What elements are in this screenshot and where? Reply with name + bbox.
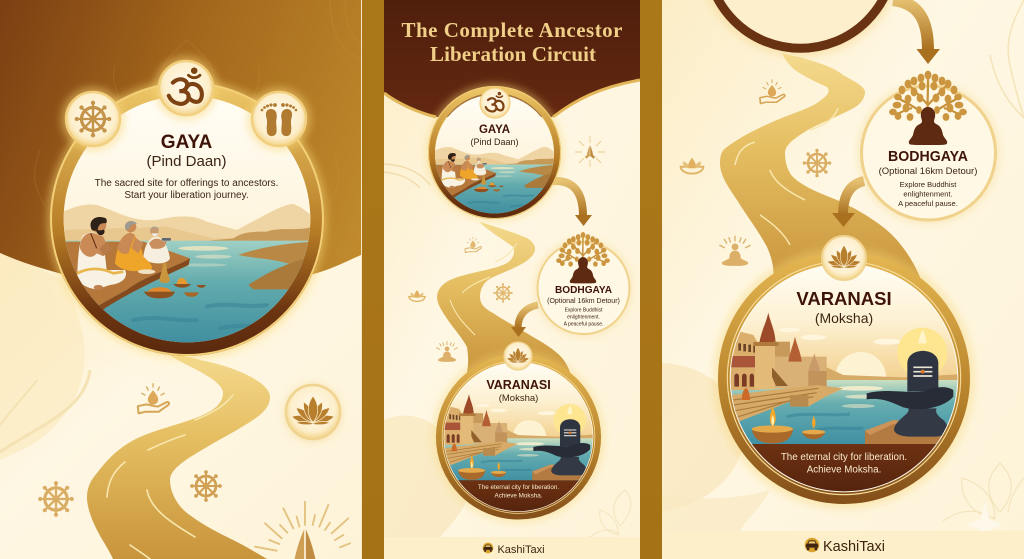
heading: Gaya small: GAYA xyxy=(479,124,510,136)
icon: meditating figure xyxy=(437,342,457,362)
subheading: detour small: (Optional 16km Detour) xyxy=(547,298,620,305)
text: Varanasi description small: Achieve Moksha. xyxy=(495,492,543,499)
text: Varanasi description: Achieve Moksha. xyxy=(807,464,881,476)
subheading: detour: (Optional 16km Detour) xyxy=(879,166,977,177)
title: Liberation Circuit xyxy=(430,42,596,66)
icon: praying hands with rays xyxy=(255,502,350,559)
main circle: Gaya xyxy=(47,79,327,359)
subheading: Pind Daan small: (Pind Daan) xyxy=(470,137,519,147)
text: Gaya description: The sacred site for offerings to ancestors. xyxy=(95,178,278,189)
icon: meditating figure xyxy=(720,236,750,266)
circle: Bodhgaya small xyxy=(534,239,632,337)
title xyxy=(402,22,622,61)
circle: Varanasi small xyxy=(432,351,604,523)
badge: Om small xyxy=(480,88,510,118)
icon: bodhi tree small xyxy=(556,232,610,283)
heading: Bodhgaya small: BODHGAYA xyxy=(555,284,612,296)
circle: Varanasi xyxy=(713,247,975,509)
text: Bodhgaya description small: A peaceful pause. xyxy=(564,322,603,328)
panel: gold frame xyxy=(361,0,662,559)
text: Bodhgaya description small: enlightenment. xyxy=(567,314,600,320)
icon: hand with drop xyxy=(760,80,785,104)
subheading: Pind Daan: (Pind Daan) xyxy=(146,153,227,170)
panel: detail poster xyxy=(662,0,1024,559)
badge: dharma wheel xyxy=(61,87,125,151)
circle: Gaya small xyxy=(426,84,564,222)
text: Gaya description: Start your liberation journey. xyxy=(124,190,249,201)
river path xyxy=(720,53,923,285)
icon: hand with drop xyxy=(138,384,169,413)
footer band xyxy=(384,537,640,559)
icon: wheel left xyxy=(38,481,74,517)
subheading: Moksha: (Moksha) xyxy=(815,310,873,326)
arrow: Gaya to Bodhgaya xyxy=(552,181,592,226)
icon: lotus bowl xyxy=(409,290,425,301)
header band xyxy=(384,0,640,117)
icon: wheel xyxy=(493,283,513,303)
footer band: KashiTaxi xyxy=(497,544,545,556)
badge: lotus xyxy=(822,236,866,280)
text: Bodhgaya description small: Explore Buddhist xyxy=(565,308,603,314)
panel: itinerary poster xyxy=(384,0,640,559)
circle: Gaya partial xyxy=(698,0,904,57)
badge: lotus small xyxy=(504,342,532,370)
river path xyxy=(87,353,270,559)
panel: Gaya poster xyxy=(0,0,361,559)
icon: wheel xyxy=(803,149,831,177)
badge: Om xyxy=(154,56,218,120)
footer band xyxy=(662,531,1024,559)
arrow: Bodhgaya to Varanasi xyxy=(511,305,538,337)
text: Varanasi description small: The eternal city for liberation. xyxy=(478,484,559,491)
badge: lotus xyxy=(284,384,342,442)
river path xyxy=(437,222,570,372)
badge: sacred feet xyxy=(247,87,311,151)
heading: Gaya: GAYA xyxy=(161,132,212,153)
heading: Varanasi small: VARANASI xyxy=(486,378,551,392)
icon: bodhi tree xyxy=(890,71,966,145)
text: Varanasi description: The eternal city for liberation. xyxy=(781,452,907,463)
text: Bodhgaya description: A peaceful pause. xyxy=(898,199,958,208)
footer band: KashiTaxi xyxy=(823,539,885,555)
text: Bodhgaya description: Explore Buddhist xyxy=(900,180,957,189)
text: Bodhgaya description: enlightenment. xyxy=(903,190,953,198)
heading: Bodhgaya: BODHGAYA xyxy=(888,148,968,165)
arrow: Bodhgaya to Varanasi xyxy=(832,181,864,227)
circle: Bodhgaya xyxy=(858,82,1000,224)
title: The Complete Ancestor xyxy=(402,18,622,42)
subheading: Moksha small: (Moksha) xyxy=(499,393,538,404)
icon: hand with drop xyxy=(465,237,481,253)
icon: praying hands with rays xyxy=(575,136,605,167)
arrow: Gaya to Bodhgaya xyxy=(893,0,940,64)
icon: lotus bowl xyxy=(681,158,703,174)
icon: wheel right xyxy=(190,470,222,502)
heading: Varanasi: VARANASI xyxy=(796,288,892,309)
